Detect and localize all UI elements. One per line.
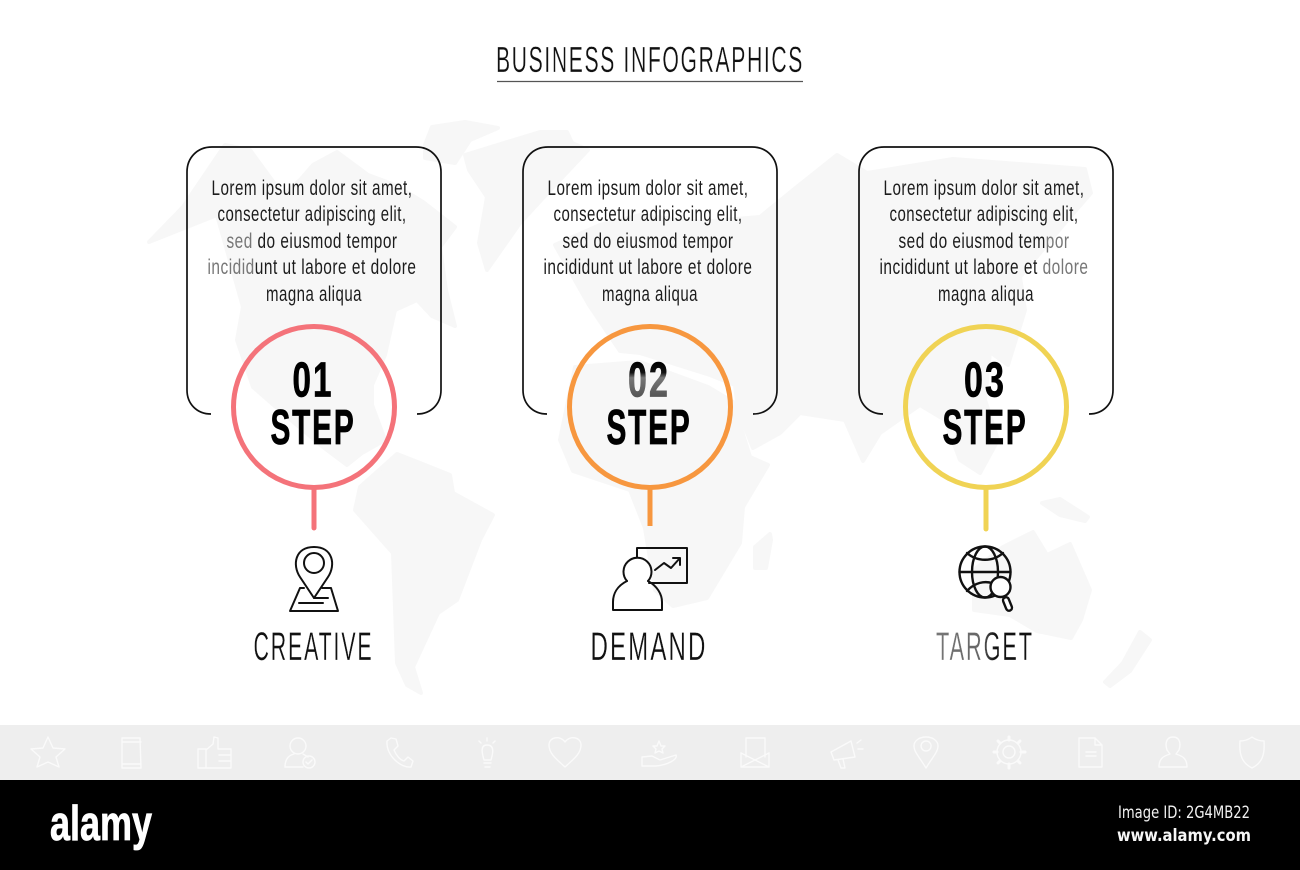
step number [270,354,356,455]
description text: sed do eiusmod tempor [898,229,1070,253]
icon: star [31,737,65,767]
footer icon strip [0,725,1300,780]
description text: Lorem ipsum dolor sit amet, [548,176,748,200]
step number [942,354,1028,455]
footer bar [0,780,1300,870]
description text: incididunt ut labore et dolore [880,255,1088,279]
description text: incididunt ut labore et dolore [208,255,416,279]
connector [984,488,988,529]
icon: telephone [387,738,413,767]
connector [312,488,316,528]
description text: consectetur adipiscing elit, [218,202,406,226]
icon: heart [549,738,581,767]
description text [544,176,752,306]
icon: globe with magnifier [960,546,1013,612]
icon: thumbs up [198,737,231,768]
label: TARGET [936,625,1034,669]
label: CREATIVE [254,625,374,669]
outline box [523,147,777,414]
title: BUSINESS INFOGRAPHICS [496,39,804,80]
description text: consectetur adipiscing elit, [890,202,1078,226]
description text [208,176,416,306]
step number: STEP [606,401,692,455]
icon: envelope [741,738,769,767]
description text: consectetur adipiscing elit, [554,202,742,226]
label: DEMAND [590,625,708,669]
step circle [570,326,730,488]
icon: gear [994,737,1025,768]
step number: 02 [628,354,670,408]
outline box [187,147,441,414]
panel: step 1 [187,147,441,669]
icon: person [1159,737,1187,767]
description text: magna aliqua [602,282,698,306]
description text: incididunt ut labore et dolore [544,255,752,279]
step number: 01 [292,354,334,408]
description text: magna aliqua [266,282,362,306]
step circle [906,326,1066,488]
step number: STEP [942,401,1028,455]
icon: location pin [914,737,938,768]
icon: megaphone [831,740,863,768]
icon: light bulb [479,738,495,767]
description text: magna aliqua [938,282,1034,306]
step number: 03 [964,354,1006,408]
website: www.alamy.com [1117,826,1251,846]
logo: alamy: alamy [50,797,152,851]
step number [606,354,692,455]
icon: smartphone [122,738,141,768]
icon: shield [1240,737,1264,768]
connector [648,488,652,526]
description text: sed do eiusmod tempor [562,229,734,253]
icon: document [1079,738,1102,767]
background world map [149,122,1150,693]
step number: STEP [270,401,356,455]
icon: presenter with chart [613,548,687,610]
icon: map pin [290,547,338,611]
panel: step 3 [859,147,1113,669]
description text [880,176,1088,306]
description text: Lorem ipsum dolor sit amet, [884,176,1084,200]
step circle [234,326,394,488]
description text: Lorem ipsum dolor sit amet, [212,176,412,200]
outline box [859,147,1113,414]
image id: Image ID: 2G4MB22 [1118,803,1250,823]
icon: user check [285,738,315,768]
description text: sed do eiusmod tempor [226,229,398,253]
icon: hand with star [642,741,676,766]
panel: step 2 [523,147,777,669]
